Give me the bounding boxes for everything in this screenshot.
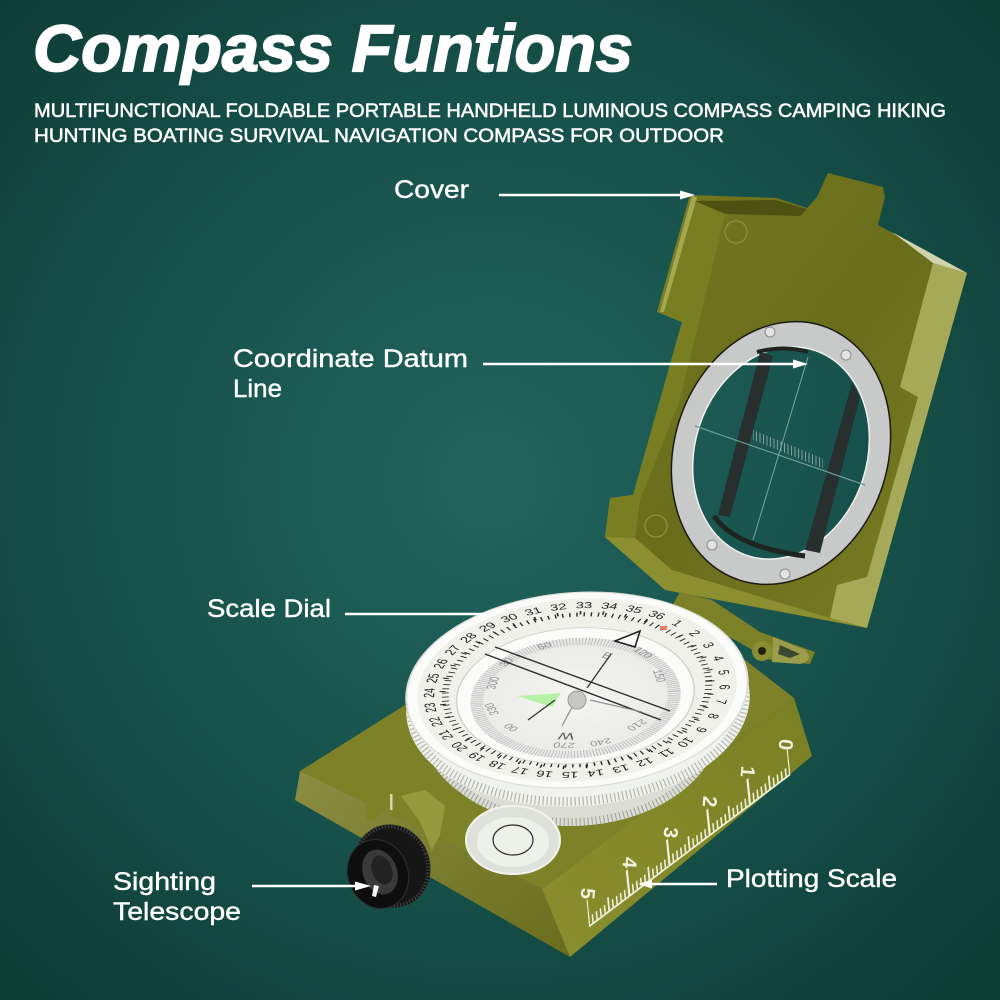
card numbers: 30 (497, 656, 517, 668)
dial numbers: 24 (421, 688, 438, 698)
dial numbers: 19 (465, 750, 489, 764)
scale dial (399, 581, 757, 818)
sighting telescope eyepiece (338, 814, 442, 918)
ring screws (707, 327, 851, 579)
dial numbers: 16 (534, 768, 554, 779)
dial numbers: 15 (561, 770, 579, 780)
subtitle (34, 100, 946, 147)
glass window (666, 324, 896, 582)
title: Compass Funtions (33, 11, 633, 85)
dial side knurl (399, 590, 757, 818)
dial numbers: 34 (600, 601, 620, 612)
dial numbers: 21 (434, 728, 457, 742)
number ring (411, 588, 743, 792)
plotting scale numbers: 1 (736, 765, 758, 778)
rivet marks (645, 221, 747, 537)
dial numbers: 8 (704, 712, 723, 720)
dial numbers: 18 (485, 758, 509, 771)
card degree ticks (473, 635, 678, 761)
dial numbers: 23 (421, 702, 440, 713)
dial numbers: 6 (716, 684, 733, 690)
lid left wall (605, 195, 725, 538)
callout: cover: Cover (394, 176, 469, 204)
red index (660, 626, 667, 630)
dial numbers: 13 (610, 762, 631, 775)
callout: sighting telescope: Sighting (113, 868, 216, 896)
lid top lip shadow (695, 200, 807, 216)
dial numbers: 7 (712, 699, 730, 705)
card numbers: 60 (535, 641, 554, 652)
dial numbers: 10 (673, 735, 697, 749)
needle (528, 654, 642, 726)
callout: coordinate datum line (233, 345, 808, 403)
callout: scale dial: Scale Dial (207, 595, 331, 623)
degree tick marks (440, 606, 714, 774)
dial numbers: 12 (633, 755, 656, 769)
dial numbers: 9 (692, 725, 711, 734)
dial numbers: 17 (509, 764, 531, 777)
card numbers: 120 (630, 646, 655, 660)
dial numbers: 20 (447, 740, 471, 754)
inner card recess (452, 620, 699, 772)
scale face (542, 698, 812, 957)
lid right edge (830, 263, 967, 628)
sighting ring bezel (637, 292, 925, 614)
callout: plotting scale: Plotting Scale (726, 865, 897, 893)
datum lines (695, 426, 865, 485)
card numbers: E (599, 650, 616, 661)
lower knurled ring (420, 618, 720, 826)
base top face (300, 660, 794, 889)
dial top in perspective (400, 581, 754, 799)
card numbers: 240 (588, 736, 613, 748)
card numbers: 300 (484, 676, 503, 690)
dial numbers: 32 (549, 601, 568, 613)
callout: plotting scale (638, 865, 897, 893)
compass base (295, 660, 812, 957)
dial numbers: 33 (575, 600, 593, 610)
dial numbers: 31 (523, 605, 544, 618)
dark guide bars (718, 352, 773, 517)
plotting scale numbers: 2 (698, 795, 720, 808)
plotting scale numbers (576, 738, 796, 900)
bezel top (400, 581, 754, 799)
dial numbers: 4 (709, 654, 728, 662)
dial numbers: 29 (476, 620, 500, 634)
plotting scale numbers: 3 (659, 826, 681, 839)
dial numbers: 25 (423, 673, 443, 684)
card numbers: 270 (552, 740, 576, 749)
plotting scale ticks (588, 761, 790, 926)
lid body (605, 173, 967, 628)
compass card (467, 631, 684, 765)
subtitle: MULTIFUNCTIONAL FOLDABLE PORTABLE HANDHELD LUMINOUS COMPASS CAMPING HIKING (34, 100, 946, 122)
sighting triangle (615, 631, 640, 647)
card numbers: W (557, 731, 575, 742)
dial numbers: 27 (441, 644, 465, 657)
callout: cover (394, 176, 695, 204)
dial numbers: 22 (425, 715, 447, 728)
dial numbers: 14 (586, 767, 605, 779)
bearing lines (495, 647, 670, 711)
dial numbers: 5 (714, 669, 733, 676)
callout: coordinate datum line: Coordinate Datum (233, 345, 468, 373)
lid bottom lip (605, 537, 867, 628)
dial numbers: 28 (457, 631, 481, 645)
callout: sighting telescope (113, 868, 371, 926)
card numbers: 210 (624, 717, 650, 732)
base front face (295, 771, 570, 957)
hub (568, 691, 586, 709)
dial numbers: 1 (668, 618, 686, 629)
dial numbers: 11 (655, 746, 678, 760)
hinge and lanyard loop (672, 592, 815, 664)
card numbers: 00 (501, 721, 522, 733)
sighting bracket (364, 783, 478, 850)
dial numbers: 35 (623, 603, 645, 616)
callout: coordinate datum line: Line (233, 375, 282, 403)
plotting scale numbers: 4 (617, 856, 640, 870)
subtitle: HUNTING BOATING SURVIVAL NAVIGATION COMPASS FOR OUTDOOR (34, 125, 724, 147)
card numbers: 330 (482, 702, 503, 716)
callout: sighting telescope: Telescope (113, 898, 241, 926)
plotting scale numbers: 0 (774, 738, 796, 751)
card numbers: 150 (649, 669, 668, 683)
luminous pointer (517, 693, 561, 707)
dial numbers: 36 (645, 609, 669, 622)
dial numbers: 30 (498, 611, 521, 625)
level bubble (466, 806, 560, 874)
compass lid (cover) (605, 173, 967, 628)
card numbers (478, 632, 672, 755)
plotting scale numbers: 5 (576, 887, 598, 900)
ruler ticks (753, 435, 823, 463)
dial numbers: 3 (699, 640, 718, 650)
dial numbers: 26 (430, 658, 452, 670)
dial numbers (414, 590, 739, 790)
dial numbers: 2 (685, 628, 704, 638)
